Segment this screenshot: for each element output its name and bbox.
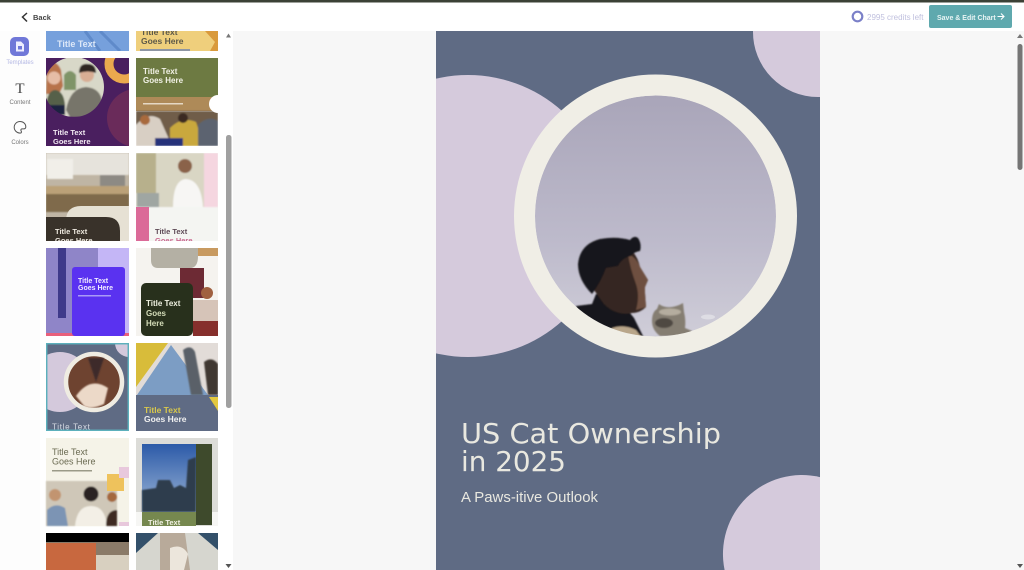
icon: templates: Templates (6, 60, 34, 66)
template thumbnail: yellow: Goes Here (141, 36, 184, 46)
template thumbnail: dark green: Here (146, 319, 164, 328)
poster: cat ownership cover (436, 31, 820, 570)
template thumbnail: kitchen (46, 153, 129, 245)
template thumbnail: cream team: Title Text (52, 447, 88, 457)
template thumbnail: triangle: Title Text (144, 405, 181, 415)
top bar (0, 0, 1024, 31)
cat (652, 303, 692, 336)
template thumbnail: kitchen: Goes Here (55, 236, 93, 245)
template thumbnail: blue (46, 31, 129, 51)
template thumbnail: cream team: Goes Here (52, 456, 96, 466)
photo: man with cat against sky (535, 96, 776, 338)
template thumbnail: olive classroom: Goes Here (143, 76, 184, 85)
template thumbnail: selected circle (46, 343, 129, 431)
template thumbnail: pink woman: Goes Here (155, 236, 193, 245)
back button: Back (33, 13, 52, 22)
icon: content (9, 81, 31, 106)
decorative circle: bottom right (723, 475, 820, 570)
template thumbnail: purple students: Title Text (53, 128, 86, 137)
template thumbnail: city (136, 438, 218, 527)
template thumbnail: dark green: Title Text (146, 299, 181, 308)
template thumbnail: dark green (136, 248, 218, 336)
template thumbnail: dark green: Goes (146, 309, 167, 318)
credits counter (853, 12, 924, 22)
credits counter: 2995 credits left (867, 13, 924, 22)
template thumbnail: pink woman: Title Text (155, 227, 188, 236)
template thumbnail: purple students (46, 58, 129, 146)
template thumbnail: blue: Title Text (57, 39, 96, 49)
icon: colors: Colors (11, 140, 29, 146)
template thumbnail: yellow (136, 31, 218, 51)
decorative circle: left (436, 75, 562, 357)
template thumbnail: orange (46, 533, 129, 570)
template thumbnail: pink woman (136, 153, 218, 245)
decorative circle: top right (753, 31, 820, 97)
thumbnail column scrollbar (226, 34, 232, 568)
template thumbnail: kitchen: Title Text (55, 227, 88, 236)
template thumbnail: purple students: Goes Here (53, 137, 91, 146)
man's shoulders (576, 294, 644, 338)
back button (22, 13, 52, 22)
template thumbnail: selected circle: Title Text (52, 422, 91, 432)
small cloud (701, 314, 715, 320)
template thumbnail: violet: Title Text (78, 278, 109, 285)
template thumbnail: city: Title Text (148, 518, 181, 527)
left sidebar (0, 31, 233, 570)
man's face and neck (594, 250, 648, 314)
icon: colors (11, 122, 29, 146)
man's hair (578, 237, 641, 294)
template thumbnail: cream team (46, 438, 129, 526)
main area scrollbar (1017, 34, 1023, 568)
poster background (436, 31, 820, 570)
template thumbnail: triangle: Goes Here (144, 414, 187, 424)
save and edit chart button (929, 5, 1012, 28)
template thumbnail: olive classroom (136, 58, 227, 146)
save and edit chart button: Save & Edit Chart (937, 15, 996, 22)
template thumbnail: violet (46, 248, 129, 336)
poster subtitle: A Paws-itive Outlook (461, 490, 599, 506)
poster title: US Cat Ownership (461, 417, 721, 450)
photo ring (514, 74, 797, 358)
icon: templates (6, 37, 34, 66)
template thumbnail: yellow: Title Text (141, 27, 178, 37)
icon: content: T (15, 81, 25, 97)
template thumbnail: olive classroom: Title Text (143, 67, 178, 76)
icon: content: Content (9, 100, 31, 106)
template thumbnail: triangle (136, 343, 218, 431)
template thumbnail: violet: Goes Here (78, 285, 113, 292)
template thumbnail: teal diamonds (136, 533, 218, 570)
poster: cat ownership cover: in 2025 (461, 445, 566, 478)
